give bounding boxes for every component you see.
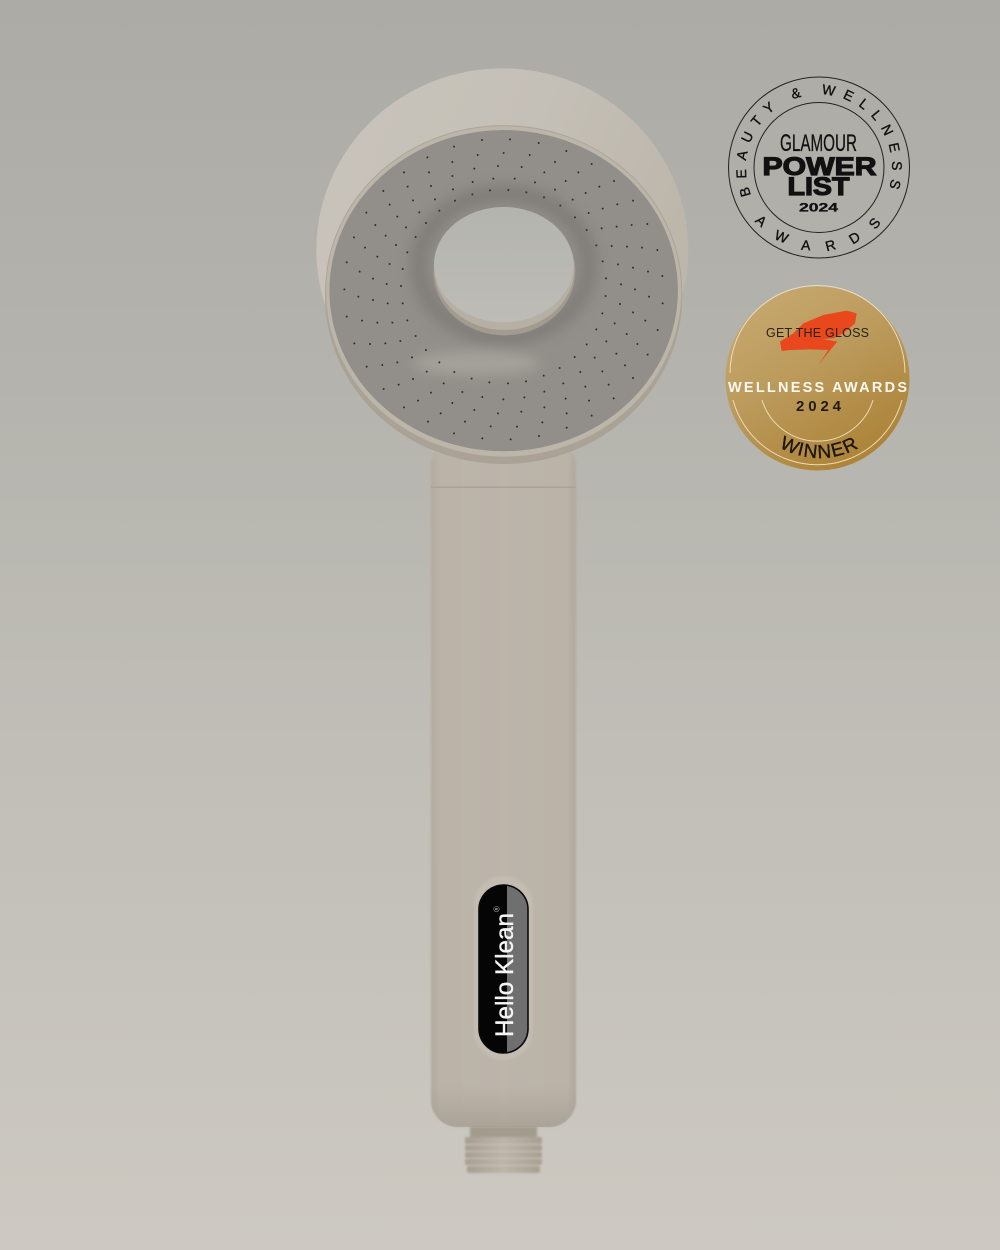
power list title: LIST [788,173,850,201]
spray nozzles [344,139,663,439]
rim [326,126,682,457]
publication name: GLAMOUR [780,130,857,157]
brush stroke logo [780,311,857,365]
spray face [329,130,678,451]
badge: Glamour Power List 2024 [728,76,910,258]
award title: WELLNESS AWARDS [728,380,907,396]
logo text: Hello Klean [491,913,519,1037]
handle [431,440,576,1127]
threaded connector [465,1120,542,1173]
year: 2024 [796,398,842,415]
winner label: WINNER [782,435,858,458]
year: 2024 [799,200,838,214]
power list title [762,153,876,201]
head body [316,68,688,432]
centre opening [433,207,575,335]
shadow under body [325,127,682,464]
shower head [316,68,688,464]
shower head product [316,68,688,1173]
ring text: awards: AWARDS [754,216,880,252]
logo text: GET THE GLOSS [766,326,869,340]
decorative arcs [730,285,905,465]
logo window [478,884,529,1054]
power list title: POWER [762,153,876,181]
badge: Get The Gloss Wellness Awards 2024 [726,285,910,470]
ring text: BEAUTY & WELLNESS [736,84,902,197]
registered mark: ® [492,906,502,912]
